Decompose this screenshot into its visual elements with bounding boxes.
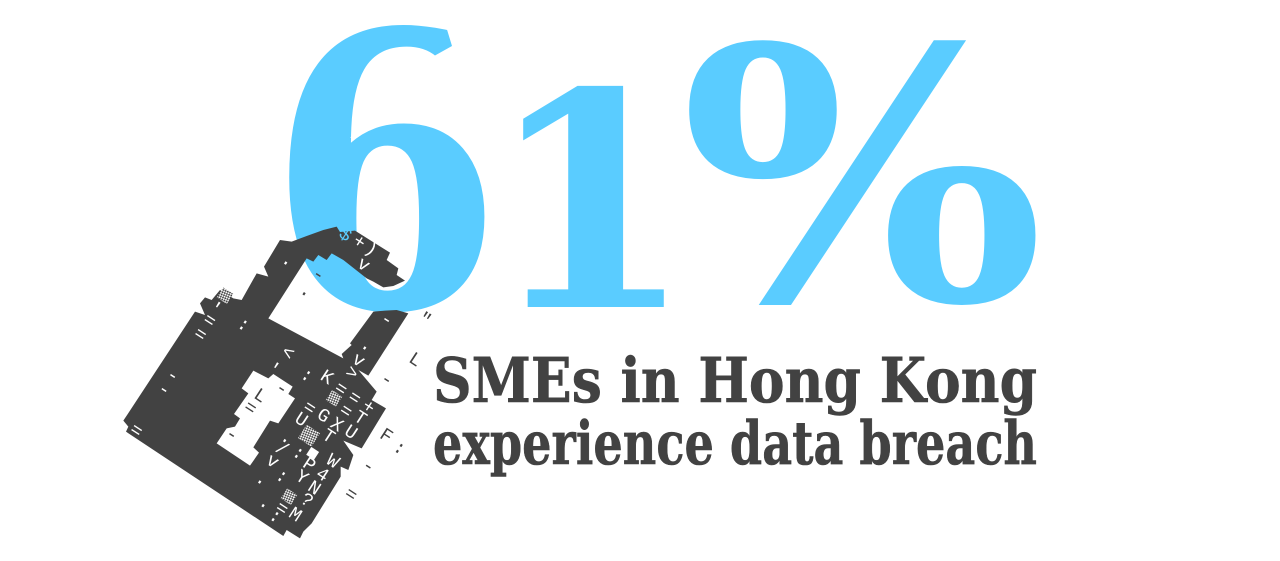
caption bbox=[433, 344, 1037, 479]
white glitch characters bbox=[125, 230, 397, 529]
dark scattered characters: L bbox=[249, 384, 271, 408]
white glitch characters: U bbox=[290, 408, 312, 432]
white glitch characters: v bbox=[348, 348, 369, 373]
blue dollar glyph: $ bbox=[334, 223, 356, 247]
white glitch characters: / bbox=[271, 437, 292, 462]
white glitch characters: = bbox=[299, 396, 320, 421]
dark scattered characters: = bbox=[340, 483, 361, 507]
icon: glitched padlock bbox=[123, 223, 435, 538]
white glitch characters: = bbox=[344, 386, 365, 411]
small white square bbox=[306, 447, 319, 460]
white glitch characters: : bbox=[288, 441, 309, 466]
dark scattered characters: - bbox=[271, 377, 292, 401]
white glitch characters: v bbox=[262, 449, 283, 474]
white glitch characters: = bbox=[335, 399, 356, 424]
white glitch characters: M bbox=[284, 503, 306, 527]
white glitch characters: G bbox=[313, 404, 334, 428]
dark scattered characters: - bbox=[358, 454, 379, 479]
dark scattered characters bbox=[221, 263, 435, 507]
white glitch characters: ' bbox=[263, 358, 284, 382]
dark scattered characters: L bbox=[404, 348, 426, 372]
white glitch characters: = bbox=[199, 309, 220, 333]
white glitch characters: : bbox=[264, 504, 286, 529]
white glitch characters: < bbox=[277, 341, 298, 366]
white glitch characters: - bbox=[376, 308, 397, 332]
dark scattered characters: F bbox=[375, 424, 397, 448]
dark scattered characters: " bbox=[414, 308, 435, 332]
white glitch characters: + bbox=[348, 230, 370, 255]
white glitch characters: . bbox=[356, 333, 377, 357]
white glitch characters: U bbox=[340, 420, 361, 445]
dark scattered characters: = bbox=[239, 396, 261, 421]
white glitch characters: N bbox=[303, 476, 325, 501]
white glitch characters: P bbox=[298, 453, 320, 477]
digit 1: 1 bbox=[487, 28, 693, 378]
white glitch characters: ) bbox=[360, 237, 382, 261]
white glitch characters: v bbox=[353, 253, 374, 277]
white glitch characters: ' bbox=[204, 297, 226, 322]
keyhole glitch cut-out bbox=[217, 371, 295, 466]
white glitch characters: = bbox=[125, 419, 147, 443]
white glitch characters: : bbox=[296, 363, 317, 388]
dark scattered characters: . bbox=[295, 278, 317, 303]
white glitch characters: K bbox=[316, 365, 338, 390]
white glitch characters: ? bbox=[296, 488, 317, 513]
white glitch characters: . bbox=[276, 425, 297, 450]
caption line 1: SMEs in Hong Kong bbox=[433, 344, 1037, 417]
white glitch characters: T bbox=[318, 424, 339, 449]
dark scattered characters: - bbox=[376, 368, 397, 392]
white glitch characters: : bbox=[233, 313, 254, 337]
caption line 2: experience data breach bbox=[433, 409, 1037, 479]
white glitch characters: Y bbox=[291, 465, 312, 490]
dark scattered characters: : bbox=[389, 436, 410, 461]
white glitch characters: . bbox=[277, 248, 298, 272]
white glitch characters: = bbox=[271, 497, 292, 521]
white glitch characters: > bbox=[341, 361, 362, 386]
white glitch characters: = bbox=[189, 323, 211, 347]
white glitch characters: T bbox=[349, 406, 371, 431]
dark scattered characters: - bbox=[308, 263, 329, 287]
dark scattered characters: - bbox=[221, 423, 242, 447]
white glitch characters: 4 bbox=[312, 463, 333, 487]
big number: 61% bbox=[289, 25, 1036, 312]
white glitch characters: W bbox=[322, 449, 344, 474]
white glitch characters: + bbox=[358, 395, 379, 420]
white glitch characters: . bbox=[254, 490, 276, 515]
white glitch characters: - bbox=[153, 378, 175, 402]
white glitch characters: X bbox=[326, 413, 347, 437]
white glitch characters: - bbox=[162, 364, 183, 388]
checker patches bbox=[217, 287, 342, 505]
padlock silhouette bbox=[123, 227, 408, 538]
white glitch characters: = bbox=[330, 377, 351, 402]
white glitch characters: : bbox=[271, 464, 292, 489]
white glitch characters: . bbox=[251, 467, 272, 491]
